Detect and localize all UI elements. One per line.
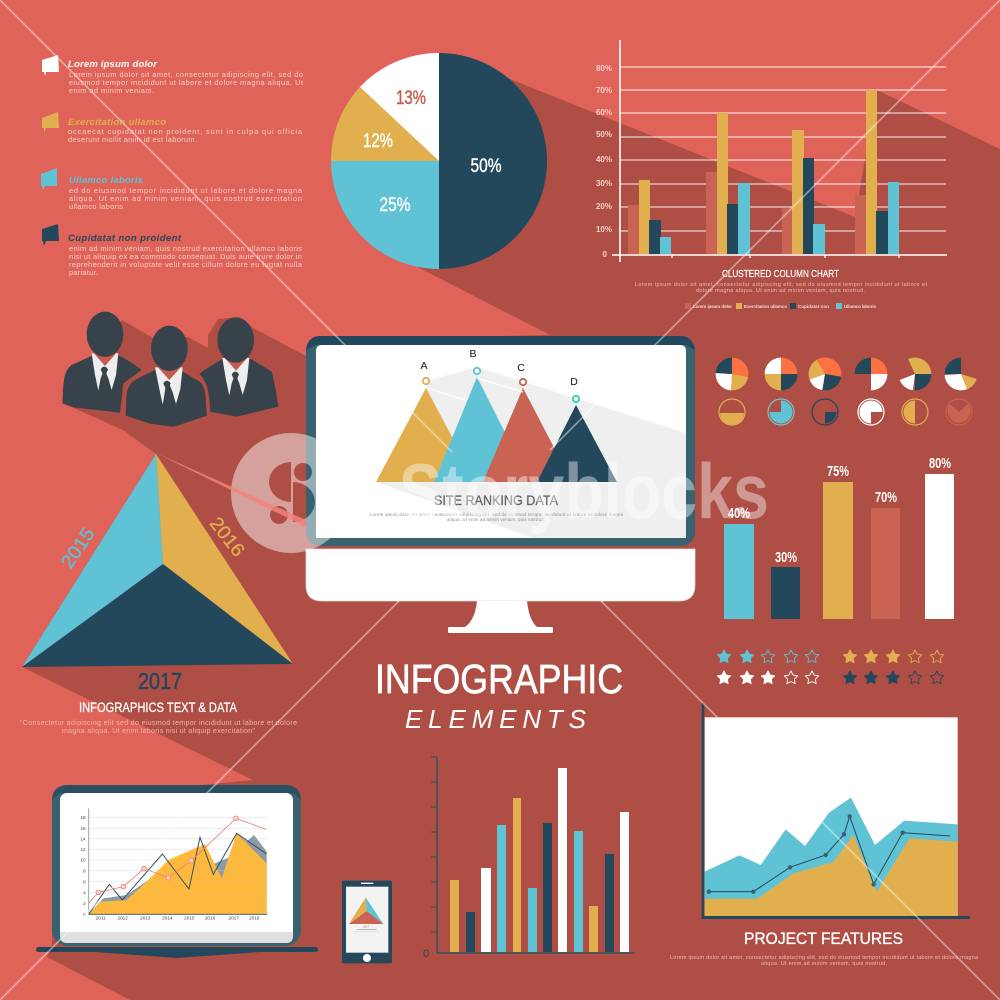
item 1: Lorem ipsum dolor: eiusmod tempor incididunt ut labore et dolore magna aliqua. Ut [69,78,303,87]
chart grid and axes [612,40,947,262]
chart legend: Ullamco laboris [844,304,876,309]
pie chart: 25% [380,195,411,216]
item 1: Lorem ipsum dolor: Lorem ipsum dolor [68,59,158,70]
mini pie 2 [773,366,789,382]
mini pie 4 [863,366,879,382]
percentage bars: 80% [929,455,951,472]
project features area chart [702,703,970,919]
bottom column chart: 0 [423,948,429,960]
laptop chart: 2012 [117,916,128,921]
site ranking description [370,512,624,522]
bottom column chart [423,757,635,960]
laptop chart: 18 [80,815,86,820]
chart y labels: 70% [596,86,612,95]
mini pie 3 [814,363,836,385]
laptop chart: 2011 [96,916,106,921]
laptop chart: 0 [83,912,86,917]
laptop chart [80,808,267,921]
item 4: Cupidatat non proident [42,224,303,277]
chart columns [628,90,899,254]
laptop chart: 8 [83,868,86,873]
laptop chart: 2018 [249,916,260,921]
ring 3 [812,399,838,425]
pie chart: 12% [363,131,393,152]
watermark wordmark: Storyblocks [399,447,769,535]
3D pyramid chart: 2016 [205,514,248,561]
laptop frame [52,785,301,946]
item 1: Lorem ipsum dolor: enim ad minim veniam. [69,86,154,95]
chart description: dolore magna aliqua. Ut enim ad minim veniam, quis nostrud. [696,288,865,294]
laptop chart: 2 [83,901,86,906]
ring 1 [719,399,745,425]
watermark pink streak [156,453,306,527]
laptop chart: 2013 [140,916,151,921]
triangle chart: site ranking: A [420,360,428,372]
3D pyramid chart [22,454,293,694]
chart title: CLUSTERED COLUMN CHART [722,269,839,280]
item 3: Ullamco laboris [41,168,303,211]
triangle chart: site ranking: C [517,362,525,374]
chart y labels: 20% [596,202,612,211]
main title [375,656,623,734]
pyramid description: magna aliqua. Ut enim laboris nisi ut aliquip exercitation" [62,728,256,735]
chart y labels: 50% [596,130,612,139]
chart y labels: 0 [603,250,608,259]
smartphone [342,881,392,963]
chart description: Lorem ipsum dolor sit amet, consectetur adipiscing elit, sed do eiusmod tempor incididunt ut labore et [635,282,927,288]
item 4: Cupidatat non proident: reprehenderit in voluptate velit esse cillum dolore eu fugiat nulla [69,260,303,269]
chart y labels: 40% [596,155,612,164]
business people icons [62,312,278,428]
3D pyramid chart: 2017 [138,668,182,694]
percentage bars: 40% [728,505,750,522]
item 2: Exercitation ullamco: deserunt mollit anim id est laborum. [68,135,197,144]
monitor screen [316,345,686,538]
white stars [717,671,819,684]
ring 2 [768,399,794,425]
laptop chart: 16 [80,826,86,831]
pyramid description: "Consectetur adipiscing elit sed do eiusmod tempor incididunt ut labore et dolore [20,720,297,727]
desktop monitor [306,336,695,633]
chart y labels: 80% [596,64,612,73]
item 3: Ullamco laboris: ed do eiusmod tempor incididunt ut labore et dolore magna [69,186,303,195]
triangle chart: site ranking [376,348,617,482]
text list: four headed paragraphs [41,55,303,277]
chart description [635,282,927,294]
main title: ELEMENTS [405,704,587,734]
chart legend: Lorem ipsum dolor [693,304,732,309]
item 3: Ullamco laboris: aliqua. Ut enim ad minim veniam, quis nostrud exercitation [69,194,302,203]
pie chart [331,53,547,269]
monitor frame [306,336,695,546]
site ranking description: aliqua. Ut enim ad minim veniam, quis nostrud. [447,517,545,522]
small pie icons row [724,363,969,385]
laptop chart: 2016 [205,916,216,921]
main title: INFOGRAPHIC [375,656,623,702]
laptop chart: 2015 [184,916,195,921]
laptop chart: 10 [80,858,86,863]
smartphone: 2017 [363,924,369,928]
person left [62,312,142,413]
laptop chart: 14 [80,836,86,841]
chart y labels: 30% [596,179,612,188]
mini pie 5 [904,363,926,385]
mini pie 1 [724,366,740,382]
item 2: Exercitation ullamco: Exercitation ullamco [68,117,166,128]
site ranking title: SITE RANKING DATA [434,492,559,508]
clustered column chart [596,40,947,309]
star ratings [717,650,944,684]
laptop chart: 2017 [228,916,239,921]
percentage bars: 70% [875,489,897,506]
laptop chart: 2014 [162,916,173,921]
monitor stand [465,601,537,627]
item 4: Cupidatat non proident: Cupidatat non proident [68,233,182,244]
monitor chin [306,549,695,601]
3D pyramid chart: 2015 [57,524,99,572]
item 4: Cupidatat non proident: enim ad minim veniam, quis nostrud exercitation ullamco laboris [69,244,302,253]
item 3: Ullamco laboris: ullamco laboris [69,202,123,211]
item 4: Cupidatat non proident: nisi ut aliquip ex ea commodo consequat. Duis aute irure dolor in [69,252,302,261]
triangle chart: site ranking: B [469,348,477,360]
laptop chart: 4 [83,890,86,895]
dark stars [843,671,944,684]
project features description: Lorem ipsum dolor sit amet, consectetur adipiscing elit, sed do eiusmod tempor incididunt ut labore et dolore magna [670,955,979,961]
chart y labels [596,64,612,259]
chart legend: Cupidatat non [798,304,829,309]
ring 5 [902,399,928,425]
chart legend: Exercitation ullamco [744,304,787,309]
person middle [124,326,208,428]
chart y labels: 10% [596,225,612,234]
person right [199,317,278,417]
percentage bars: 75% [827,463,849,480]
project features heading: PROJECT FEATURES [744,929,903,948]
pie chart: 13% [396,88,426,109]
laptop with line and area chart [36,785,318,958]
laptop base [36,947,318,958]
laptop chart: 6 [83,879,86,884]
columns [450,768,629,952]
laptop screen [60,793,293,943]
item 2: Exercitation ullamco: occaecat cupidatat non proident, sunt in culpa qui officia [68,127,303,136]
project features description [670,955,979,967]
item 3: Ullamco laboris: Ullamco laboris [69,175,143,186]
item 4: Cupidatat non proident: pariatur. [69,268,98,277]
gold stars [843,650,944,663]
project features description: aliqua. Ut enim ad minim veniam, quis nostrud. [761,961,887,967]
mini pie 6 [953,366,969,382]
item 1: Lorem ipsum dolor: Lorem ipsum dolor sit amet, consectetur adipiscing elit, sed do [69,70,303,79]
axes [431,757,635,953]
percentage bars [724,455,954,619]
percentage bars: 30% [775,549,797,566]
ring 6 [946,399,972,425]
blue stars [717,650,819,663]
item 2: Exercitation ullamco [42,112,303,144]
triangle chart: site ranking: D [570,376,578,388]
watermark logo [231,433,351,553]
pyramid description [20,720,297,735]
chart y labels: 60% [596,108,612,117]
site ranking description: Lorem ipsum dolor sit amet, consectetur adipiscing elit, sed do eiusmod tempor incididunt ut labore et dolore magna [370,512,624,517]
item 1: Lorem ipsum dolor [42,55,303,95]
ring 4 [858,399,884,425]
screen long shadow [377,367,686,538]
chart legend [685,303,876,309]
pie chart: 50% [470,156,502,177]
pyramid heading: INFOGRAPHICS TEXT & DATA [79,699,238,715]
ring icons row [719,399,972,425]
laptop chart: 12 [80,847,86,852]
